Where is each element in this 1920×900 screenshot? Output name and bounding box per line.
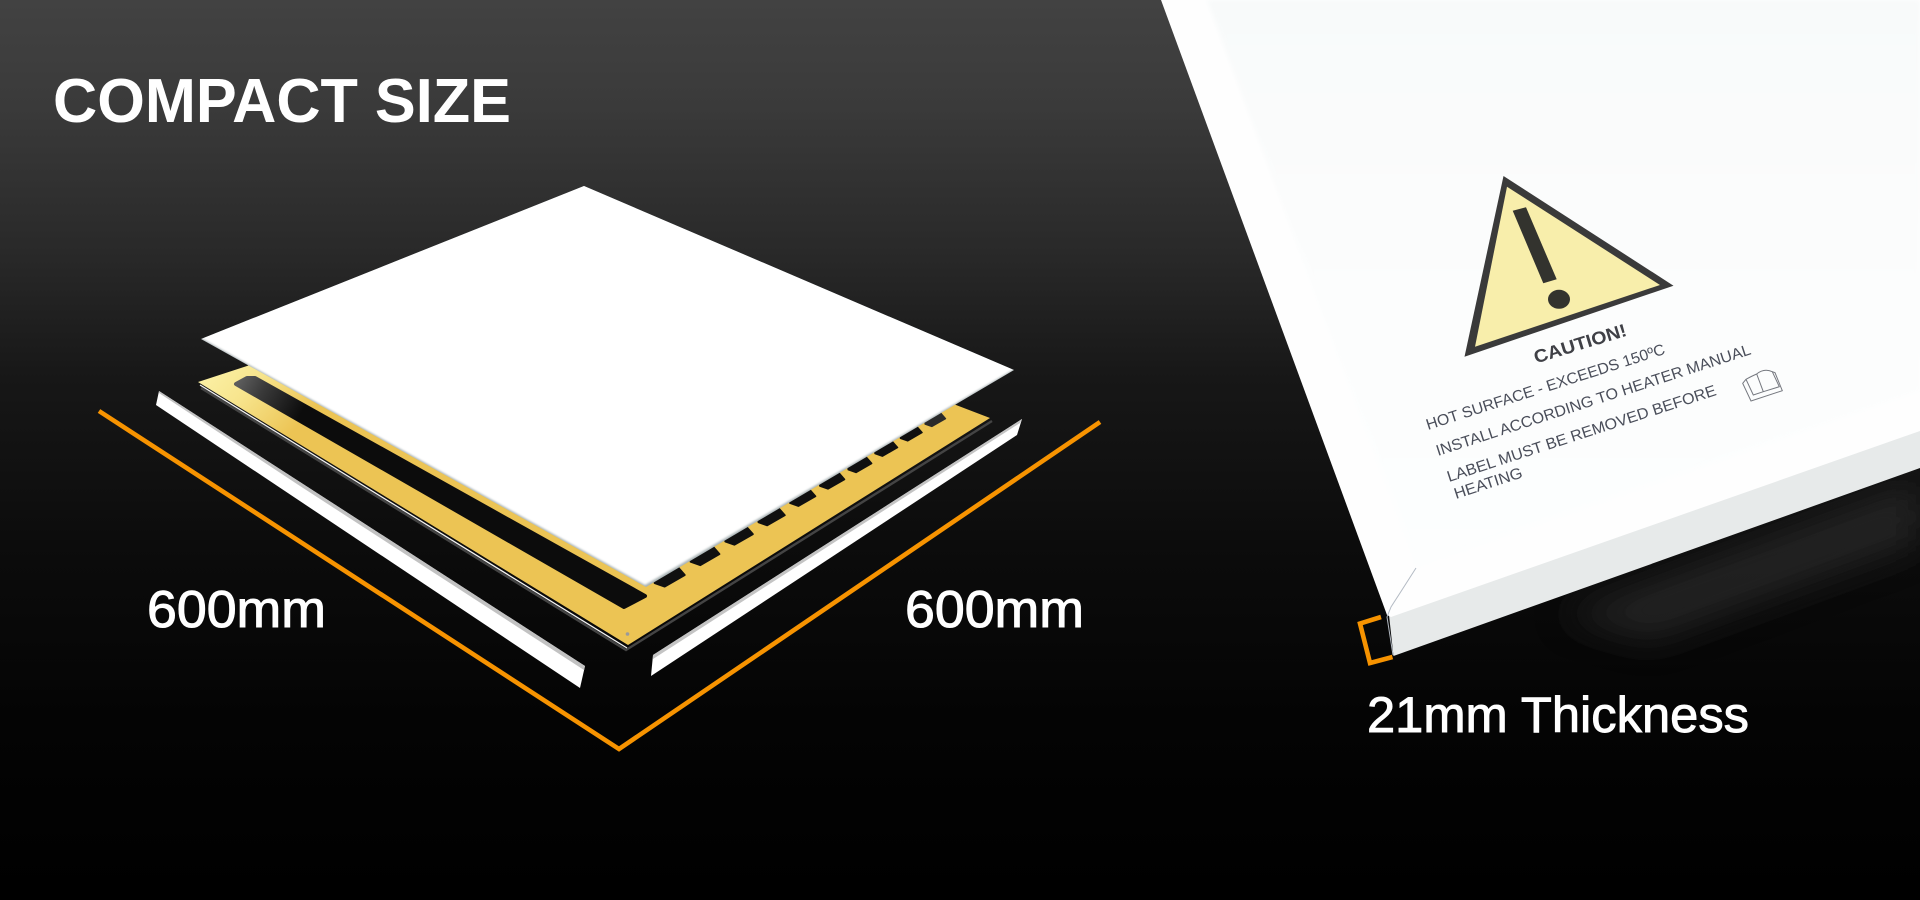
caution text: CAUTION! [1531,320,1629,367]
warning triangle [1464,176,1674,357]
panel: exploded heater diagram [99,150,1100,749]
panel: heater corner photo [1161,0,1920,663]
label: right 600mm: 600mm [905,581,1084,639]
soft glow under photo [1560,482,1920,640]
caution text: INSTALL ACCORDING TO HEATER MANUAL [1434,342,1753,460]
label: left 600mm: 600mm [147,581,326,639]
side face [1389,430,1920,656]
top white plate [201,186,1014,587]
inner recess [1207,0,1920,568]
icon: manual book [1743,370,1782,401]
gold heater element [198,240,992,650]
row of small slots [655,410,946,586]
caution text: HEATING [1452,465,1525,503]
orange dimension line [99,411,1100,749]
caution text: LABEL MUST BE REMOVED BEFORE [1445,382,1718,486]
label: 21mm thickness: 21mm Thickness [1367,687,1749,743]
orange thickness bracket [1360,617,1392,663]
long slot [236,378,645,607]
right side strip [651,419,1022,676]
top face [1161,0,1920,617]
title: COMPACT SIZE [53,67,511,136]
caution text: HOT SURFACE - EXCEEDS 150ºC [1424,341,1667,434]
screw dots [626,632,629,636]
corner crease [1387,568,1416,655]
left side strip [156,391,585,688]
caution text [1424,320,1753,503]
